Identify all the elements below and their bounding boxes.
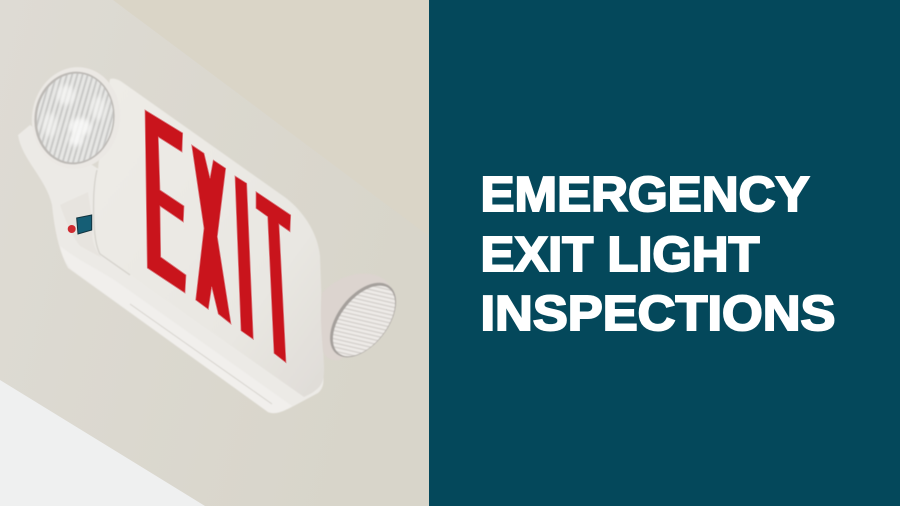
side seam of housing <box>94 170 130 275</box>
title line 1: EMERGENCY <box>480 167 810 222</box>
left lamp lens <box>31 69 119 167</box>
photo: exit sign on wall <box>0 0 429 506</box>
left lamp <box>25 61 127 175</box>
status indicators <box>68 215 92 234</box>
title line 3: INSPECTIONS <box>480 286 836 341</box>
letter I <box>235 176 253 339</box>
sign left shoulder <box>60 192 102 258</box>
right lamp <box>317 271 409 369</box>
sign unit <box>18 79 324 413</box>
lower white wall <box>0 380 205 506</box>
sign front face <box>93 79 324 397</box>
right lamp lens <box>321 275 407 367</box>
left lamp highlights <box>43 85 105 146</box>
right lamp rim <box>317 271 409 369</box>
letter T <box>256 192 291 363</box>
left lamp housing <box>25 61 127 175</box>
EXIT lettering <box>145 110 291 363</box>
letter X <box>192 145 231 324</box>
red indicator light <box>68 225 76 233</box>
blue test button <box>77 215 92 234</box>
housing underside band <box>60 246 292 413</box>
left lamp rim <box>28 66 121 170</box>
sign bracket and side housing <box>18 125 323 413</box>
ceiling area top right <box>113 0 430 237</box>
title <box>480 167 836 341</box>
wall background <box>0 0 430 506</box>
letter E <box>145 110 186 293</box>
title line 2: EXIT LIGHT <box>480 227 760 282</box>
lower edge seam <box>130 304 272 404</box>
right lamp shade <box>321 274 394 360</box>
panel: dark teal title background <box>429 0 900 506</box>
